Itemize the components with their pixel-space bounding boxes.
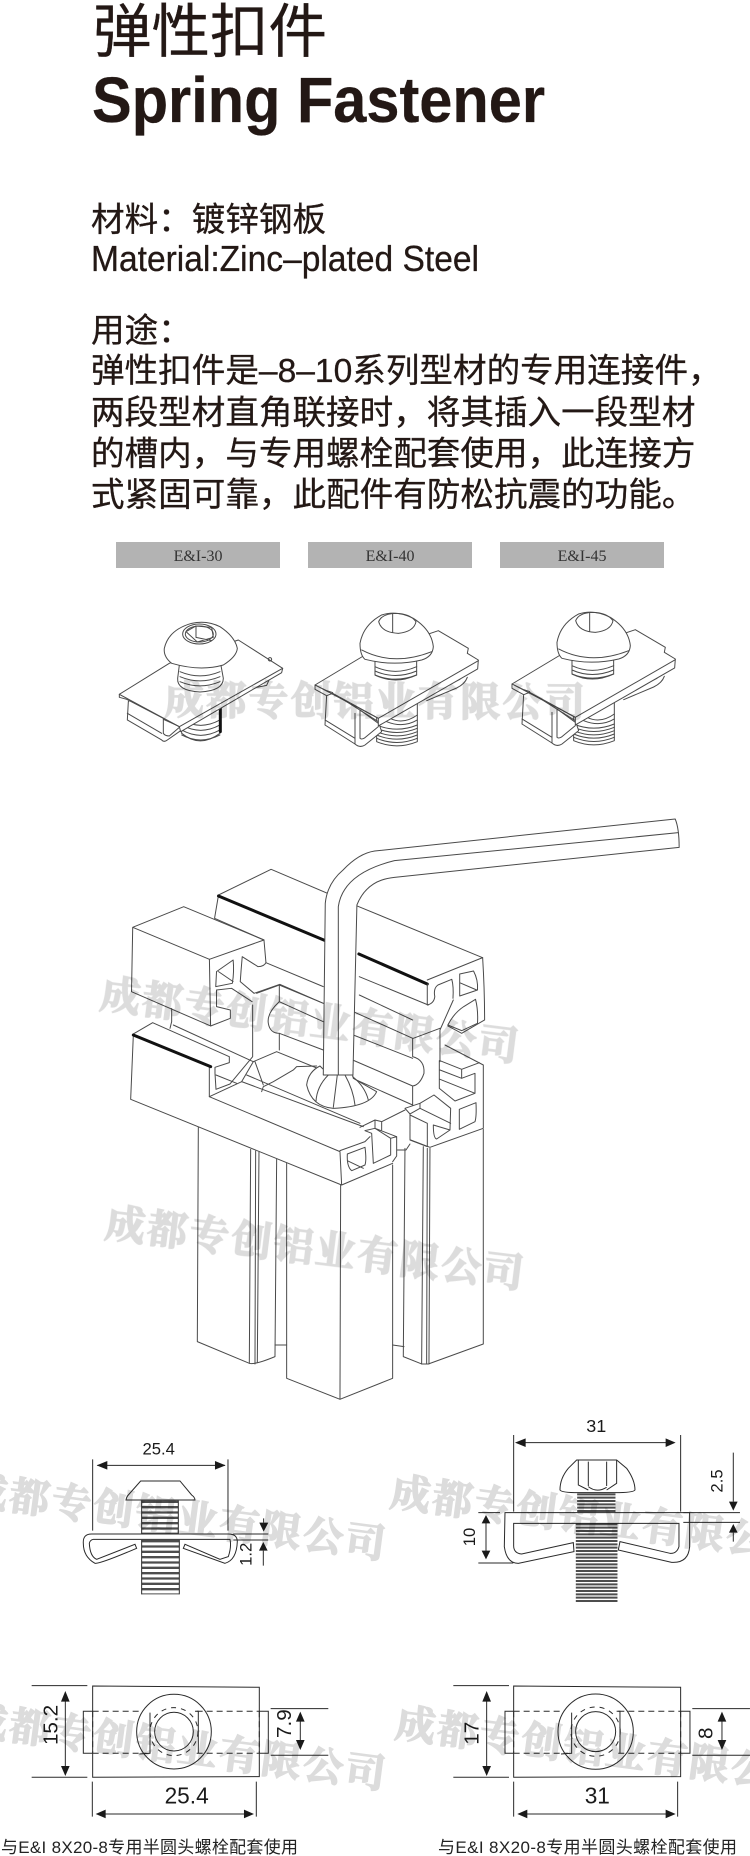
right end of beams [340, 1045, 483, 1185]
drawing: top view 25.4 x 15.2: 15.2 [39, 1705, 62, 1745]
label bar: E&I-40: E&I-40 [366, 548, 414, 565]
drawing: top view 31 x 17: 8 [694, 1728, 717, 1739]
wrench base flare [307, 1066, 377, 1108]
watermarks: 成都专创铝业有限公司 [102, 1192, 527, 1299]
drawing: side view 25.4: 1.2 [237, 1543, 256, 1566]
title: Chinese heading: 弹性扣件 [93, 0, 327, 65]
columns [197, 1127, 483, 1399]
drawing: top view 31 x 17 [453, 1686, 750, 1818]
label bar: E&I-45 [500, 542, 664, 568]
icon: fastener E&I-30 [119, 622, 283, 741]
back beam and upper left beam [132, 869, 485, 1033]
drawing: side view 31: 2.5 [707, 1469, 726, 1493]
watermarks: 成都专创铝业有限公司 [97, 962, 522, 1072]
watermarks: 成都专创铝业有限公司 [164, 669, 585, 728]
illustration: profile assembly with hex wrench [131, 819, 679, 1399]
title: English heading: Spring Fastener [92, 64, 545, 136]
drawing: top view 25.4 x 15.2 [32, 1686, 328, 1818]
drawing: side view 25.4: 25.4 [142, 1439, 175, 1458]
icon: fastener E&I-40 [315, 613, 478, 746]
drawing: side view 31 [460, 1416, 740, 1603]
drawing: top view 25.4 x 15.2: 7.9 [273, 1709, 296, 1738]
flare radial lines [316, 1075, 368, 1107]
text block: usage: 两段型材直角联接时，将其插入一段型材 [91, 394, 695, 432]
text block: usage: 弹性扣件是–8–10系列型材的专用连接件， [91, 352, 722, 390]
text block: usage [91, 312, 722, 514]
text block: material: 材料：镀锌钢板 [91, 201, 326, 239]
label bar: E&I-30: E&I-30 [174, 548, 222, 565]
label bar: E&I-30 [116, 542, 280, 568]
text block: usage: 的槽内，与专用螺栓配套使用，此连接方 [91, 435, 695, 473]
lower beam and slot details [131, 977, 453, 1185]
hex wrench [323, 819, 679, 1075]
text block: material [91, 201, 479, 279]
label bar: E&I-45: E&I-45 [558, 548, 606, 565]
icon: fastener E&I-45 [512, 612, 675, 745]
watermarks [0, 669, 750, 1803]
drawing: top view 31 x 17: 17 [460, 1722, 483, 1745]
drawing: side view 31: 31 [586, 1416, 606, 1436]
text block: material: Material:Zinc–plated Steel [91, 238, 479, 279]
text block: usage: 用途： [91, 312, 192, 350]
drawing: side view 31: 10 [460, 1528, 479, 1546]
label bar: E&I-40 [308, 542, 472, 568]
drawing: top view 25.4 x 15.2: 25.4 [165, 1782, 209, 1808]
text block: usage: 式紧固可靠，此配件有防松抗震的功能。 [91, 476, 695, 514]
drawing: top view 31 x 17: 31 [585, 1782, 610, 1808]
drawing: side view 25.4 [83, 1439, 268, 1594]
